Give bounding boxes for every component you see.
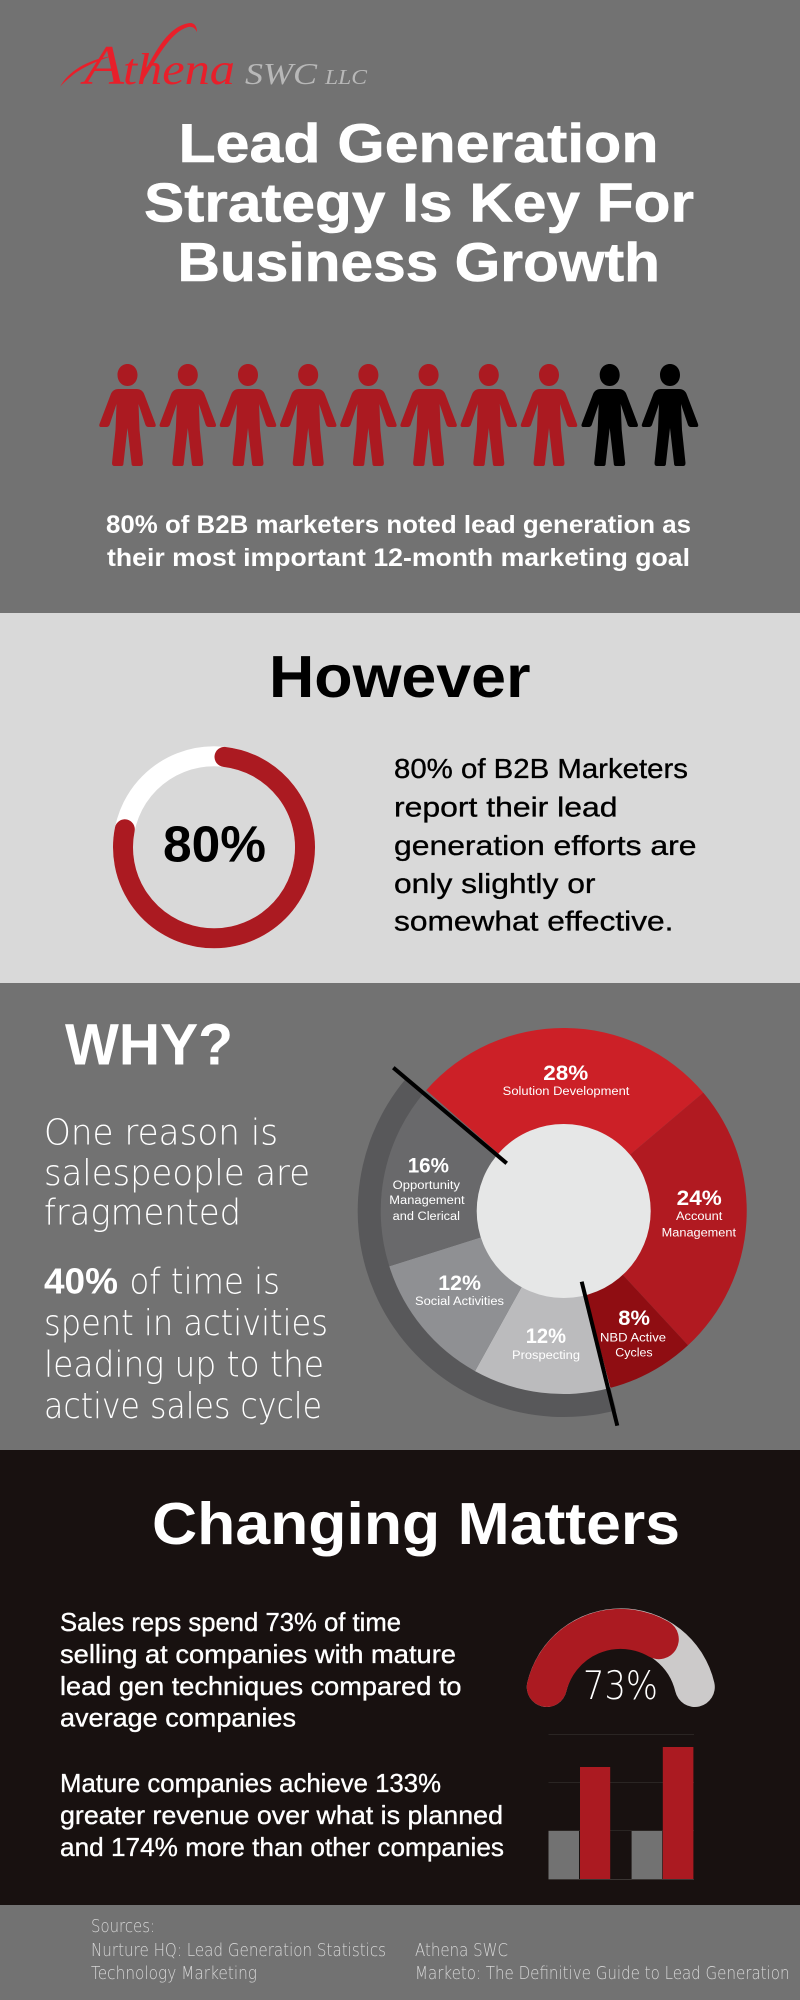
segment: prospecting 12%: 12%: [526, 1325, 566, 1348]
segment: NBD active cycles 8%: NBD Active: [600, 1332, 666, 1344]
segment: social activities 12%: 12%: [438, 1272, 481, 1295]
text: 40% of time: [44, 1260, 328, 1427]
segment: opportunity management and clerical 16%: Management: [389, 1195, 466, 1207]
text: fragmented salespeople: [44, 1112, 310, 1234]
segment: solution development 28%: [426, 1028, 703, 1211]
segment: NBD active cycles 8%: 8%: [618, 1307, 650, 1330]
heading: However: However: [269, 644, 531, 710]
text: sources, left column: Sources:: [91, 1917, 155, 1937]
text: time selling: average companies: [60, 1702, 296, 1732]
logo: Athena SWC LLC: thena: [123, 45, 235, 94]
segment: social activities 12%: Social Activities: [415, 1296, 504, 1308]
text: 40% of time: active sales cycle: [44, 1386, 322, 1427]
segment: solution development 28%: Solution Development: [503, 1086, 630, 1098]
text: 40% of time: 40%: [44, 1260, 118, 1302]
text: effectiveness statistic: report their lead: [394, 792, 618, 822]
text: effectiveness statistic: somewhat effective.: [394, 906, 674, 936]
gauge chart: 73%: 73%: [583, 1664, 658, 1709]
text: time selling: selling at companies with mature: [60, 1639, 456, 1669]
text: fragmented salespeople: fragmented: [44, 1192, 241, 1234]
text: goal statistic: [106, 511, 691, 572]
text: sources, left column: Technology Marketing: [91, 1964, 257, 1984]
logo: Athena SWC LLC: A: [79, 35, 125, 97]
panel: however: [0, 613, 800, 983]
segment: account management 24%: Account: [676, 1211, 723, 1223]
text: sources, right column: Athena SWC: [415, 1941, 508, 1961]
gauge chart: 73%: [547, 1628, 695, 1709]
segment: opportunity management and clerical 16%: 16%: [408, 1154, 449, 1178]
text: time selling: Sales reps spend 73% of time: [60, 1607, 401, 1637]
text: 40% of time: of time is: [130, 1262, 280, 1302]
text: time selling: [60, 1607, 462, 1732]
text: sources, left column: Nurture HQ: Lead Generation Statistics: [91, 1941, 386, 1961]
text: revenue: and 174% more than other companies: [60, 1832, 504, 1862]
segment: account management 24%: Management: [662, 1228, 737, 1240]
text: effectiveness statistic: 80% of B2B Marketers: [394, 753, 688, 784]
logo: Athena SWC LLC: LLC: [324, 65, 368, 89]
donut chart: how sales time is spent: [358, 1028, 747, 1426]
text: effectiveness statistic: generation efforts are: [394, 830, 696, 861]
text: revenue: [60, 1768, 504, 1862]
logo: Athena SWC LLC: SWC: [245, 56, 317, 91]
segment: account management 24%: [564, 1093, 747, 1345]
icon row: ten people, eight red and two black: [99, 364, 698, 466]
panel: changing matters: [0, 1450, 800, 1905]
text: goal statistic: 80% of B2B marketers noted lead generation as: [106, 511, 691, 539]
segment: solution development 28%: 28%: [543, 1062, 589, 1085]
segment: prospecting 12%: Prospecting: [512, 1350, 580, 1362]
segment: opportunity management and clerical 16%: [381, 1090, 564, 1266]
text: effectiveness statistic: [394, 753, 696, 936]
logo: Athena SWC LLC: [60, 23, 368, 97]
text: time selling: lead gen techniques compared to: [60, 1671, 462, 1701]
title: Business Growth: [178, 231, 660, 293]
segment: prospecting 12%: [475, 1211, 610, 1394]
panel: header: [0, 0, 800, 613]
text: revenue: greater revenue over what is planned: [60, 1800, 503, 1830]
text: sources, right column: [415, 1941, 790, 1984]
text: fragmented salespeople: salespeople are: [44, 1153, 310, 1194]
title: Lead Generation: [178, 112, 658, 174]
heading: WHY?: WHY?: [65, 1012, 233, 1078]
segment: opportunity management and clerical 16%: and Clerical: [393, 1211, 460, 1223]
donut chart: 80%: 80%: [163, 816, 266, 872]
segment: social activities 12%: [389, 1211, 564, 1371]
text: revenue: Mature companies achieve 133%: [60, 1768, 441, 1798]
panel: why: [0, 983, 800, 1450]
text: effectiveness statistic: only slightly or: [394, 868, 596, 899]
segment: opportunity management and clerical 16%: Opportunity: [393, 1180, 460, 1192]
text: 40% of time: spent in activities: [44, 1303, 328, 1344]
text: sources, left column: [91, 1917, 386, 1984]
text: goal statistic: their most important 12-month marketing goal: [107, 544, 690, 572]
segment: NBD active cycles 8%: [564, 1211, 688, 1388]
donut chart: 80%: [123, 756, 305, 938]
text: fragmented salespeople: One reason is: [44, 1112, 278, 1154]
text: 40% of time: leading up to the: [44, 1344, 324, 1386]
panel: sources footer: [0, 1905, 800, 2000]
bar chart: revenue comparison: [548, 1734, 694, 1880]
segment: NBD active cycles 8%: Cycles: [615, 1348, 653, 1360]
segment: account management 24%: 24%: [677, 1187, 722, 1210]
title: [144, 112, 694, 293]
title: Strategy Is Key For: [144, 172, 694, 234]
heading: Changing Matters: Changing Matters: [152, 1491, 680, 1557]
